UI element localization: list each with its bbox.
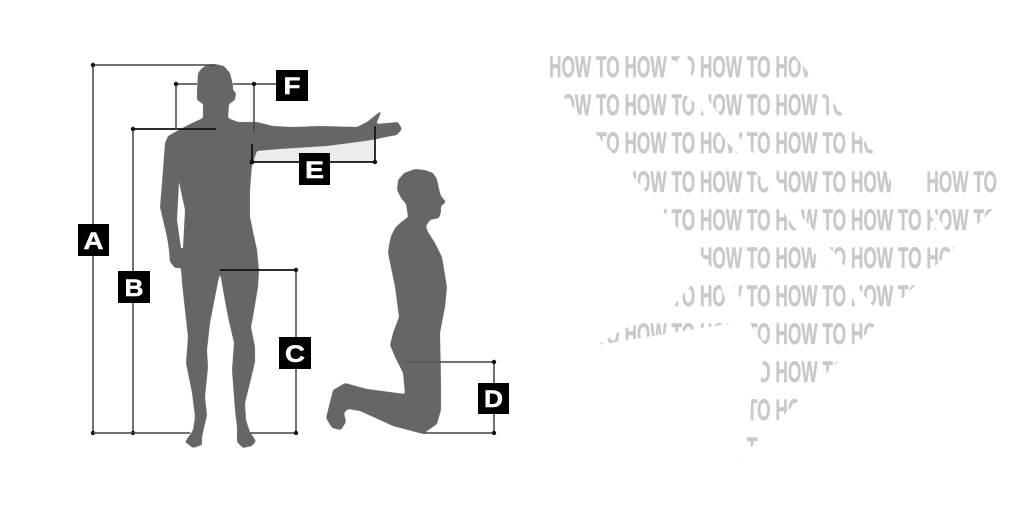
measure E: arm length	[250, 126, 377, 185]
measure C: inseam height: C	[285, 341, 305, 368]
measure D: kneeling thigh height	[405, 360, 509, 435]
shaded area under arm	[253, 138, 375, 162]
measure F: head to shoulder: F	[284, 73, 300, 100]
measure A: full height: A	[84, 228, 104, 255]
panel: body measurement diagram	[78, 63, 509, 448]
panel: how to text wing pattern	[549, 51, 997, 465]
measure E: arm length: E	[305, 157, 324, 184]
measure F: head to shoulder	[174, 70, 308, 132]
icon: standing figure silhouette	[160, 64, 402, 448]
measure C: inseam height	[93, 268, 311, 435]
measure B: shoulder height: B	[124, 275, 144, 302]
measure A: full height	[78, 63, 215, 435]
icon: kneeling figure silhouette	[326, 169, 447, 434]
measure D: kneeling thigh height: D	[484, 386, 503, 413]
measure B: shoulder height	[118, 127, 216, 435]
